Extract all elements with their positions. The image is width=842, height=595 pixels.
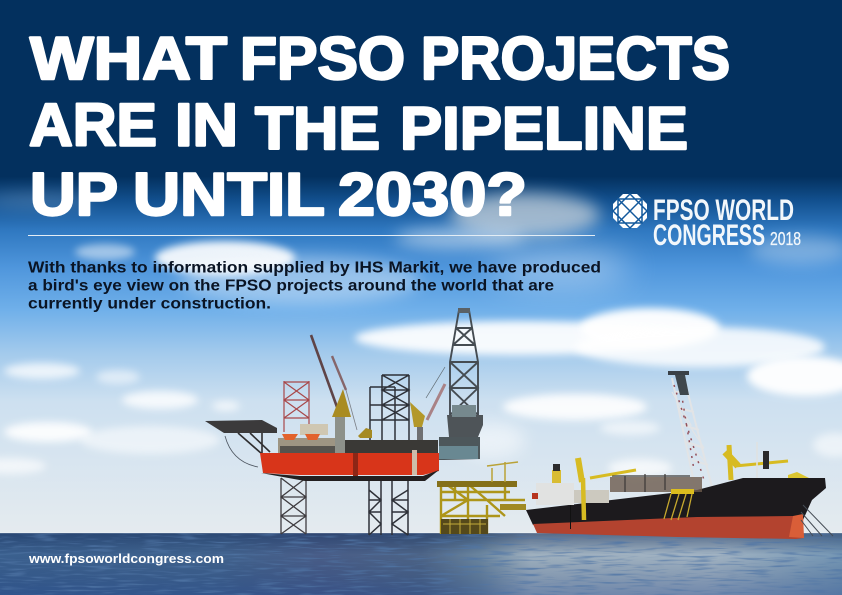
title: 2030? [338,161,527,228]
rig left leg [281,381,309,534]
platform jacket [441,484,525,534]
rig upper deck [278,438,340,453]
logo wordmark: CONGRESS [653,219,765,252]
logo wordmark [653,194,801,252]
illustration: jack-up drilling rig [205,308,526,535]
background: sea [0,532,842,595]
rig centre legs [369,375,409,535]
mooring lines [801,505,833,536]
intro text: currently under construction. [28,296,271,312]
title: IN [175,92,238,158]
illustration: FPSO vessel [526,371,833,539]
logo: FPSO World Congress 2018 [613,194,801,252]
derrick [450,310,478,415]
logo icon [613,194,647,228]
title: ARE [29,92,157,158]
flare tower [672,378,712,487]
divider [28,235,595,236]
title: UP [30,161,118,228]
vessel deck pipework [610,477,702,492]
intro text: a bird's eye view on the FPSO projects around the world that are [28,278,554,294]
title: PROJECTS [421,25,730,92]
cranes [311,335,445,430]
title: FPSO [240,25,405,92]
website url: www.fpsoworldcongress.com [28,552,224,566]
yellow cranes [578,445,788,520]
title: WHAT [30,25,227,92]
intro text: With thanks to information supplied by IHS Markit, we have produced [28,260,601,276]
title: THE [255,95,380,162]
vessel superstructure [536,483,574,505]
helideck [205,420,277,433]
intro text [28,260,601,312]
title [29,25,730,228]
logo wordmark: 2018 [770,229,801,249]
vessel hull [526,478,826,525]
title: PIPELINE [400,95,688,162]
rig red hull [260,453,439,475]
title: UNTIL [133,161,325,228]
